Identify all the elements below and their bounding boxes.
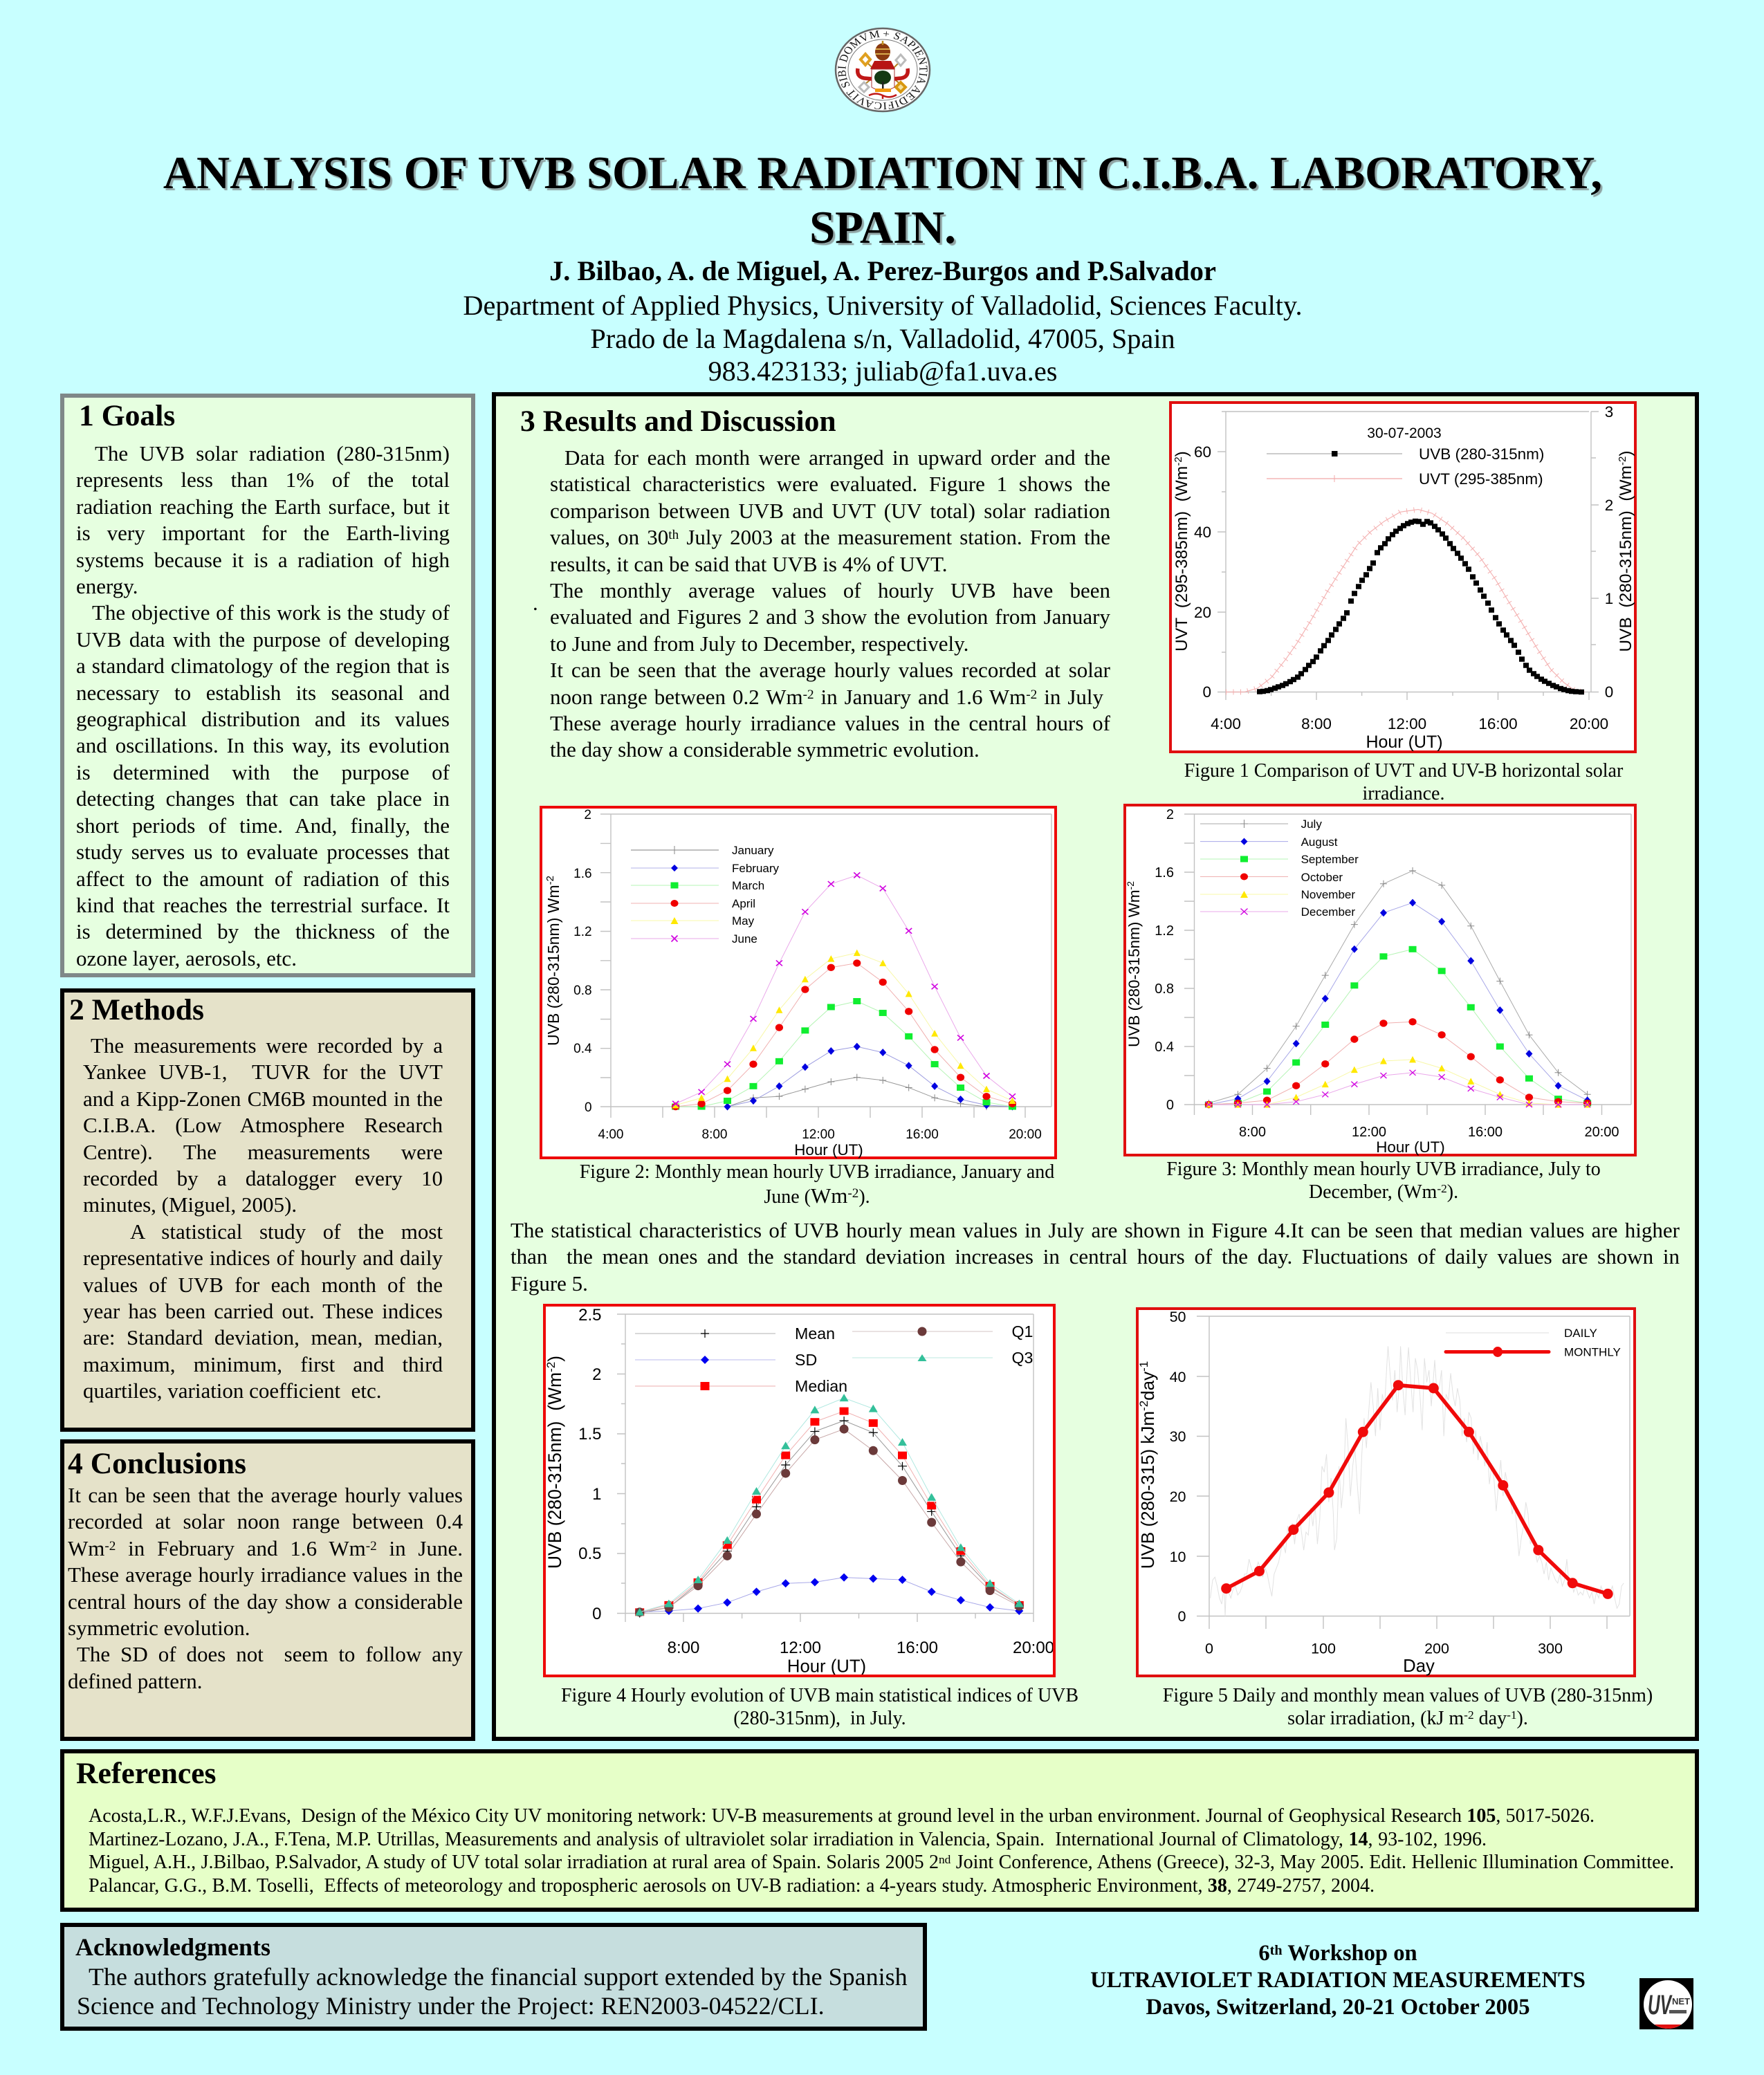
text: reference list: Martinez-Lozano, J.A., F.Tena, M.P. Utrillas, Measurements and analysis of ultraviolet solar irradiation in Valencia, Spain. International Journal of Climatology, 14, 93-102, 1996. (89, 1829, 1487, 1850)
figure 4 axis labels: 0 (592, 1605, 602, 1623)
figure 3 axis labels: 0.8 (1155, 981, 1174, 997)
caption: figure 5: Figure 5 Daily and monthly mean values of UVB (280-315nm) (1163, 1685, 1653, 1706)
figure 3 axis labels: 2 (1166, 807, 1174, 822)
affiliation: 983.423133; juliab@fa1.uva.es (708, 356, 1057, 387)
workshop information: ULTRAVIOLET RADIATION MEASUREMENTS (1090, 1968, 1586, 1993)
figure 5 legend (1446, 1327, 1621, 1358)
figure 4 axis labels: 1.5 (578, 1425, 602, 1444)
text: results: Data for each month were arranged in upward order and the (564, 445, 1110, 470)
text: results: results, it can be said that UVB is 4% of UVT. (550, 552, 948, 576)
text: methods: recorded by a datalogger every 10 (83, 1166, 443, 1190)
figure 1: UVB vs UVT chart (1169, 401, 1637, 753)
text: results: statistical characteristics were evaluated. Figure 1 shows the (550, 472, 1110, 496)
icon: UVNET logo: UV (1648, 1990, 1673, 2020)
text: methods: minutes, (Miguel, 2005). (83, 1192, 297, 1217)
text: conclusions: central hours of the day show a considerable (68, 1589, 463, 1614)
figure 5 axis labels: 0 (1205, 1641, 1213, 1657)
figure 2 axis labels: 4:00 (598, 1127, 623, 1142)
panel: methods (60, 988, 475, 1432)
figure 2 axis labels: 2 (584, 808, 591, 822)
figure 2 legend: February (732, 862, 780, 875)
text: results: The monthly average values of hourly UVB have been (550, 578, 1110, 602)
text: methods: A statistical study of the most (130, 1219, 443, 1244)
figure 1 axis labels: 4:00 (1211, 715, 1241, 732)
figure 2 axis labels: 12:00 (802, 1127, 835, 1142)
caption: figure 1: irradiance. (1363, 783, 1444, 804)
text: acknowledgments: The authors gratefully acknowledge the financial support extended by the Spanish (89, 1963, 908, 1991)
figure 5 axis labels (1137, 1309, 1563, 1676)
figure 1 axis labels: 8:00 (1301, 715, 1332, 732)
heading: results: 3 Results and Discussion (520, 405, 836, 438)
affiliation: Prado de la Magdalena s/n, Valladolid, 47005, Spain (590, 322, 1175, 354)
text: methods: values of UVB for each month of the (83, 1273, 443, 1297)
text: results: to June and from July to December, respectively. (550, 631, 968, 656)
figure 1 axis labels: Hour (UT) (1366, 732, 1443, 752)
figure 5 axis labels: -2 (1137, 1401, 1150, 1411)
caption: figure 2 (580, 1161, 1054, 1208)
heading: conclusions: 4 Conclusions (68, 1447, 246, 1480)
figure 5 legend: DAILY (1564, 1327, 1597, 1340)
text: conclusions (68, 1483, 463, 1693)
figure 3 axis labels: UVB (280-315nm) Wm (1126, 889, 1143, 1047)
text: acknowledgments (77, 1963, 908, 2020)
figure 2 axis labels: 1.2 (573, 925, 592, 939)
text: results: noon range between 0.2 Wm-2 in January and 1.6 Wm-2 in July (550, 685, 1103, 709)
UVT curve (1226, 509, 1585, 692)
heading: methods: 2 Methods (69, 993, 204, 1026)
figure 1 axis labels: UVT (295-385nm) (Wm (1173, 466, 1191, 652)
text: goals: and oscillations. In this way, its evolution (76, 733, 450, 757)
title: SPAIN. (809, 203, 956, 253)
figure 4 legend: Mean (795, 1325, 835, 1343)
monthly series (1226, 1385, 1608, 1594)
text: conclusions: Wm-2 in February and 1.6 Wm-2 in June. (68, 1536, 463, 1560)
figure 2: monthly mean January to June chart (540, 806, 1057, 1159)
figure 4: July statistical indices chart (543, 1304, 1056, 1677)
figure 3 axis labels: 0 (1166, 1098, 1174, 1113)
figure 4 axis labels: 0.5 (578, 1544, 602, 1563)
figure 5 axis labels: 10 (1170, 1549, 1186, 1565)
text: conclusions: These average hourly irradiance values in the (68, 1562, 463, 1587)
text: figure 4 and 5 introduction: The statistical characteristics of UVB hourly mean values in July are shown in Figure 4.It can be seen that median values are higher (511, 1218, 1680, 1242)
figure 1 axis labels: 20:00 (1570, 715, 1608, 732)
text: goals: is determined with the purpose of (76, 760, 450, 784)
icon: UVNET logo: NET (1672, 1996, 1690, 2007)
figure 4 axis labels: 12:00 (780, 1639, 821, 1657)
text: reference list (89, 1805, 1674, 1897)
figure 3 data series (1209, 871, 1588, 1105)
figure 1 axis labels: UVB (280-315nm) (Wm (1617, 465, 1635, 652)
figure 5: daily and monthly mean chart (1136, 1307, 1636, 1677)
text: goals: is determined by the thickness of the (76, 919, 450, 943)
text: results: comparison between UVB and UVT (UV total) solar radiation (550, 499, 1110, 523)
text: results: values, on 30th July 2003 at the measurement station. From the (550, 525, 1110, 549)
figure 1 axis labels: 3 (1605, 403, 1613, 421)
figure 3 axis labels (1125, 807, 1619, 1156)
figure 2 axis labels: 20:00 (1009, 1127, 1042, 1142)
text: methods: C.I.B.A. (Low Atmosphere Research (83, 1113, 443, 1137)
figure 5 axis labels: Day (1403, 1657, 1435, 1676)
figure 4 axis labels: Hour (UT) (787, 1657, 866, 1677)
heading: references: References (76, 1757, 217, 1790)
text: figure 4 and 5 introduction: Figure 5. (511, 1271, 588, 1295)
stray dot: . (533, 591, 538, 615)
figure 2 axis labels: 0.8 (573, 984, 592, 998)
figure 1 axis labels: 12:00 (1388, 715, 1426, 732)
text: goals: The UVB solar radiation (280-315nm) (95, 441, 450, 465)
figure 3 axis labels: Hour (UT) (1376, 1138, 1445, 1156)
figure 4 axis labels: 2 (592, 1365, 602, 1384)
figure 1 date and legend: UVB (280-315nm) (1419, 445, 1544, 463)
text: results: These average hourly irradiance values in the central hours of (550, 711, 1110, 735)
icon: UVNET logo (1639, 1978, 1693, 2029)
text: goals: necessary to establish its seasonal and (76, 681, 450, 705)
figure 5 axis labels: UVB (280-315) kJm (1137, 1411, 1158, 1569)
panel: conclusions (60, 1439, 475, 1741)
figure 5 legend: MONTHLY (1564, 1346, 1621, 1358)
title (163, 148, 1603, 253)
text: goals: geographical distribution and its values (76, 707, 450, 731)
figure 1 axis labels: 2 (1605, 497, 1613, 514)
figure 5 axis labels: 20 (1170, 1488, 1186, 1505)
figure 5 axis labels: -1 (1137, 1361, 1150, 1372)
text: goals: kind that reaches the terrestrial surface. It (76, 893, 450, 917)
figure 4 legend (635, 1322, 1033, 1395)
panel: goals (60, 394, 475, 977)
figure 2 axis labels: 8:00 (702, 1127, 727, 1142)
workshop information (1090, 1941, 1586, 2020)
figure 1 axis labels: 16:00 (1478, 715, 1518, 732)
figure 5 axis labels: day (1137, 1372, 1158, 1401)
figure 3 legend: September (1301, 853, 1359, 866)
text: methods: are: Standard deviation, mean, median, (83, 1325, 443, 1349)
text: figure 4 and 5 introduction: than the mean ones and the standard deviation increases in central hours of the day. Fluctuations of daily values are shown in (511, 1244, 1680, 1269)
figure 1 axis labels: 20 (1194, 604, 1211, 621)
panel: references (60, 1749, 1699, 1912)
figure 1 date and legend (1267, 425, 1544, 488)
figure 2 axis labels: -2 (544, 876, 556, 885)
figure 1 axis labels: 1 (1605, 590, 1613, 607)
caption: figure 2: Figure 2: Monthly mean hourly UVB irradiance, January and (580, 1161, 1054, 1183)
figure 4 legend: SD (795, 1351, 817, 1369)
figure 1 axis labels: ) (1617, 450, 1635, 456)
figure 2 legend: May (732, 914, 755, 928)
caption: figure 4 (561, 1685, 1078, 1729)
figure 4 axis labels: -2 (544, 1362, 558, 1372)
caption: figure 4: (280-315nm), in July. (733, 1707, 906, 1729)
affiliation (463, 290, 1303, 387)
figure 2 axis labels: UVB (280-315nm) Wm (544, 885, 562, 1046)
authors: J. Bilbao, A. de Miguel, A. Perez-Burgos and P.Salvador (549, 255, 1216, 286)
figure 2 axis labels: 1.6 (573, 867, 592, 881)
panel: acknowledgments (60, 1923, 927, 2031)
text: methods (83, 1033, 443, 1403)
figure 3 axis labels: 1.6 (1155, 865, 1174, 880)
university seal: + SAPIENTIA AEDIFICAVIT SIBI DOMVM (838, 30, 928, 109)
text: methods: maximum, minimum, first and third (83, 1352, 443, 1376)
figure 2 axis labels: 0 (585, 1100, 592, 1115)
daily series (1211, 1346, 1624, 1616)
figure 5 axis labels: 50 (1170, 1309, 1186, 1325)
text: goals: energy. (76, 574, 138, 598)
text: conclusions: The SD of does not seem to follow any (77, 1642, 463, 1666)
figure 2 legend: April (732, 897, 755, 910)
text: reference list: Palancar, G.G., B.M. Toselli, Effects of meteorology and tropospheric aerosols on UV-B radiation: a 4-years study. Atmospheric Environment, 38, 2749-2757, 2004. (89, 1875, 1375, 1897)
figure 4 axis labels: 16:00 (897, 1639, 938, 1657)
text: goals: study serves us to evaluate processes that (76, 840, 450, 864)
caption: figure 1 (1184, 760, 1623, 804)
figure 1 axis labels: ) (1173, 451, 1191, 456)
text: results: evaluated and Figures 2 and 3 show the evolution from January (550, 605, 1110, 629)
figure 3: monthly mean July to December chart (1123, 804, 1637, 1156)
text: goals: is very important for the Earth-living (76, 521, 450, 545)
text: methods: year has been carried out. These indices (83, 1299, 443, 1323)
caption: figure 5: solar irradiation, (kJ m-2 day-1). (1287, 1707, 1528, 1729)
text: methods: representative indices of hourly and daily (83, 1246, 443, 1270)
caption: figure 1: Figure 1 Comparison of UVT and UV-B horizontal solar (1184, 760, 1623, 782)
figure 4 data series (640, 1398, 1019, 1613)
figure 2 legend (631, 844, 780, 946)
text: goals: short periods of time. And, finally, the (76, 813, 450, 838)
text: results: the day show a considerable symmetric evolution. (550, 737, 980, 762)
text: reference list: Miguel, A.H., J.Bilbao, P.Salvador, A study of UV total solar irradiation at rural area of Spain. Solaris 2005 2nd Joint Conference, Athens (Greece), 32-3, May 2005. Edit. Hellenic Illumination Committee. (89, 1852, 1674, 1873)
text: goals: The objective of this work is the study of (92, 600, 450, 625)
figure 2 legend: June (732, 932, 757, 946)
figure 3 axis labels: 8:00 (1239, 1125, 1266, 1140)
text: figure 4 and 5 introduction (511, 1218, 1680, 1295)
figure 1 axis labels: 60 (1194, 443, 1211, 461)
figure 3 legend (1200, 818, 1359, 919)
text: methods: quartiles, variation coefficient etc. (83, 1378, 382, 1403)
figure 4 axis labels: ) (544, 1356, 565, 1362)
figure 1 axis labels: -2 (1617, 456, 1628, 465)
text: methods: Yankee UVB-1, TUVR for the UVT (83, 1060, 443, 1084)
caption: figure 4: Figure 4 Hourly evolution of UVB main statistical indices of UVB (561, 1685, 1078, 1706)
heading: goals: 1 Goals (79, 399, 175, 432)
figure 2 axis labels (544, 808, 1042, 1159)
figure 4 legend: Q1 (1011, 1322, 1033, 1340)
figure 3 legend: August (1301, 836, 1338, 849)
text: conclusions: symmetric evolution. (68, 1616, 250, 1640)
figure 4 axis labels: 2.5 (578, 1306, 602, 1325)
figure 1 date and legend: UVT (295-385nm) (1419, 470, 1543, 488)
text: goals: systems because it is a radiation of high (76, 548, 450, 572)
figure 2 legend: January (732, 844, 774, 857)
figure 1 date and legend: 30-07-2003 (1367, 425, 1442, 441)
workshop information: Davos, Switzerland, 20-21 October 2005 (1146, 1995, 1530, 2020)
text: goals: radiation reaching the Earth surface, but it (76, 495, 450, 519)
text: goals: a standard climatology of the region that is (76, 654, 450, 678)
workshop information: 6th Workshop on (1258, 1941, 1417, 1966)
text: goals: UVB data with the purpose of developing (76, 627, 450, 652)
figure 2 axis labels: Hour (UT) (794, 1141, 863, 1159)
figure 5 axis labels: 200 (1424, 1641, 1449, 1657)
text: goals (76, 441, 450, 970)
figure 3 axis labels: 12:00 (1352, 1125, 1386, 1140)
text: conclusions: It can be seen that the average hourly values (68, 1483, 463, 1507)
text: reference list: Acosta,L.R., W.F.J.Evans, Design of the México City UV monitoring network: UV-B measurements at ground level in the urban environment. Journal of Geophysical Research 105, 5017-5026. (89, 1805, 1595, 1827)
figure 1 axis labels: -2 (1173, 456, 1184, 466)
figure 2 axis labels: 0.4 (573, 1042, 592, 1056)
figure 1 axis labels: 40 (1194, 524, 1211, 541)
figure 1 axis labels: 0 (1202, 683, 1211, 701)
text: conclusions: defined pattern. (68, 1669, 203, 1693)
heading: acknowledgments: Acknowledgments (75, 1933, 270, 1961)
caption: figure 3: December, (Wm-2). (1309, 1181, 1458, 1202)
text: goals: ozone layer, aerosols, etc. (76, 946, 297, 970)
figure 3 legend: October (1301, 871, 1343, 884)
figure 3 axis labels: 16:00 (1468, 1125, 1503, 1140)
figure 1 axis labels: 0 (1605, 683, 1613, 701)
figure 3 legend: December (1301, 905, 1355, 919)
text: acknowledgments: Science and Technology Ministry under the Project: REN2003-04522/CLI. (77, 1992, 825, 2020)
figure 2 axis labels: 16:00 (906, 1127, 939, 1142)
caption: figure 3 (1166, 1159, 1601, 1202)
figure 4 axis labels: 1 (592, 1485, 602, 1504)
figure 4 axis labels: 8:00 (668, 1639, 699, 1657)
figure 3 legend: July (1301, 818, 1322, 831)
figure 4 axis labels (544, 1306, 1054, 1677)
figure 3 legend: November (1301, 888, 1355, 901)
figure 5 axis labels: 300 (1538, 1641, 1563, 1657)
text: methods: and a Kipp-Zonen CM6B mounted in the (83, 1087, 443, 1111)
caption: figure 3: Figure 3: Monthly mean hourly UVB irradiance, July to (1166, 1159, 1601, 1180)
figure 3 axis labels: 0.4 (1155, 1040, 1174, 1055)
caption: figure 2: June (Wm-2). (764, 1183, 870, 1208)
text: conclusions: recorded at solar noon range between 0.4 (68, 1509, 463, 1533)
figure 5 axis labels: 30 (1170, 1428, 1186, 1445)
panel: results and discussion (492, 392, 1699, 1741)
figure 4 axis labels: 20:00 (1013, 1639, 1054, 1657)
figure 5 axis labels: 0 (1178, 1608, 1186, 1625)
figure 4 legend: Q3 (1011, 1349, 1033, 1367)
UVB curve (1257, 522, 1584, 692)
text: goals: affect to the amount of radiation of this (76, 866, 450, 891)
figure 3 axis labels: -2 (1125, 881, 1136, 889)
figure 2 legend: March (732, 879, 764, 892)
text: goals: detecting changes that can take place in (76, 786, 450, 811)
text: goals: represents less than 1% of the total (76, 468, 450, 492)
figure 3 axis labels: 20:00 (1584, 1125, 1619, 1140)
caption: figure 5 (1163, 1685, 1653, 1729)
affiliation: Department of Applied Physics, University of Valladolid, Sciences Faculty. (463, 290, 1303, 321)
text: results (550, 445, 1110, 762)
figure 5 axis labels: 40 (1170, 1369, 1186, 1385)
figure 3 axis labels: 1.2 (1155, 923, 1174, 939)
figure 4 axis labels: UVB (280-315nm) (Wm (544, 1372, 565, 1569)
text: methods: The measurements were recorded by a (91, 1033, 443, 1058)
figure 5 axis labels: 100 (1311, 1641, 1336, 1657)
figure 4 legend: Median (795, 1377, 847, 1395)
figure 1 axis labels (1173, 403, 1635, 752)
text: methods: Centre). The measurements were (83, 1140, 443, 1164)
title: ANALYSIS OF UVB SOLAR RADIATION IN C.I.B.A. LABORATORY, (163, 148, 1602, 199)
figure 2 data series (676, 875, 1012, 1107)
text: results: It can be seen that the average hourly values recorded at solar (550, 658, 1110, 682)
